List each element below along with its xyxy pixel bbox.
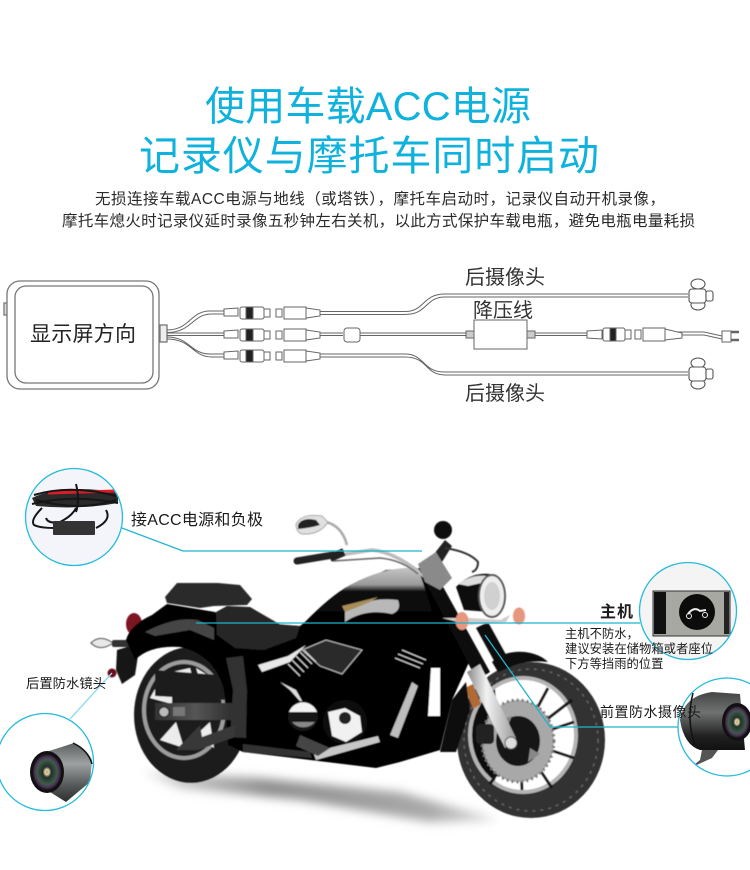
title: 记录仪与摩托车同时启动 <box>139 133 599 179</box>
rear fender and body <box>126 568 470 768</box>
display direction label: 显示屏方向 <box>30 323 136 346</box>
title <box>139 85 599 179</box>
label front camera: 前置防水摄像头 <box>600 704 701 720</box>
label rear camera: 后置防水镜头 <box>26 676 106 691</box>
label step-down cable: 降压线 <box>473 299 533 322</box>
main unit note: 下方等挡雨的位置 <box>565 656 663 671</box>
front forks <box>424 574 517 752</box>
cable connectors <box>224 307 739 362</box>
handlebar and mirrors <box>296 515 478 590</box>
callout: power cable <box>26 468 122 566</box>
callout: rear camera <box>0 714 94 810</box>
motorcycle <box>91 515 605 822</box>
front fender <box>492 652 548 672</box>
label rear camera top: 后摄像头 <box>465 266 545 289</box>
fuel tank <box>145 568 432 640</box>
passenger pad <box>165 583 252 608</box>
title: 使用车载ACC电源 <box>205 85 531 129</box>
rear lights and plate <box>91 613 142 684</box>
description text <box>62 190 695 230</box>
label rear camera bottom: 后摄像头 <box>465 382 545 405</box>
rider seat <box>216 606 300 650</box>
chain guard <box>155 656 247 750</box>
front wheel <box>457 662 605 818</box>
main unit note: 主机不防水， <box>565 626 639 641</box>
cables <box>167 294 722 375</box>
description text: 摩托车熄火时记录仪延时录像五秒钟左右关机，以此方式保护车载电瓶，避免电瓶电量耗损 <box>62 212 695 230</box>
display unit box <box>4 281 167 389</box>
label main unit: 主机 <box>600 602 633 621</box>
footboard and exhaust <box>243 735 380 760</box>
engine <box>258 640 440 744</box>
wiring diagram <box>4 266 739 405</box>
description text: 无损连接车载ACC电源与地线（或塔铁），摩托车启动时，记录仪自动开机录像， <box>95 190 665 208</box>
rear camera bottom <box>689 358 713 389</box>
rear wheel <box>134 647 248 783</box>
callout: front camera <box>678 678 750 776</box>
main unit note <box>565 626 713 671</box>
ground shadow <box>143 772 500 822</box>
rear camera top <box>689 279 713 310</box>
label power: 接ACC电源和负极 <box>131 511 263 529</box>
callout leader lines <box>70 528 678 727</box>
main unit note: 建议安装在储物箱或者座位 <box>565 641 713 656</box>
headlight and indicators <box>442 574 525 630</box>
callout: main unit <box>640 562 736 660</box>
